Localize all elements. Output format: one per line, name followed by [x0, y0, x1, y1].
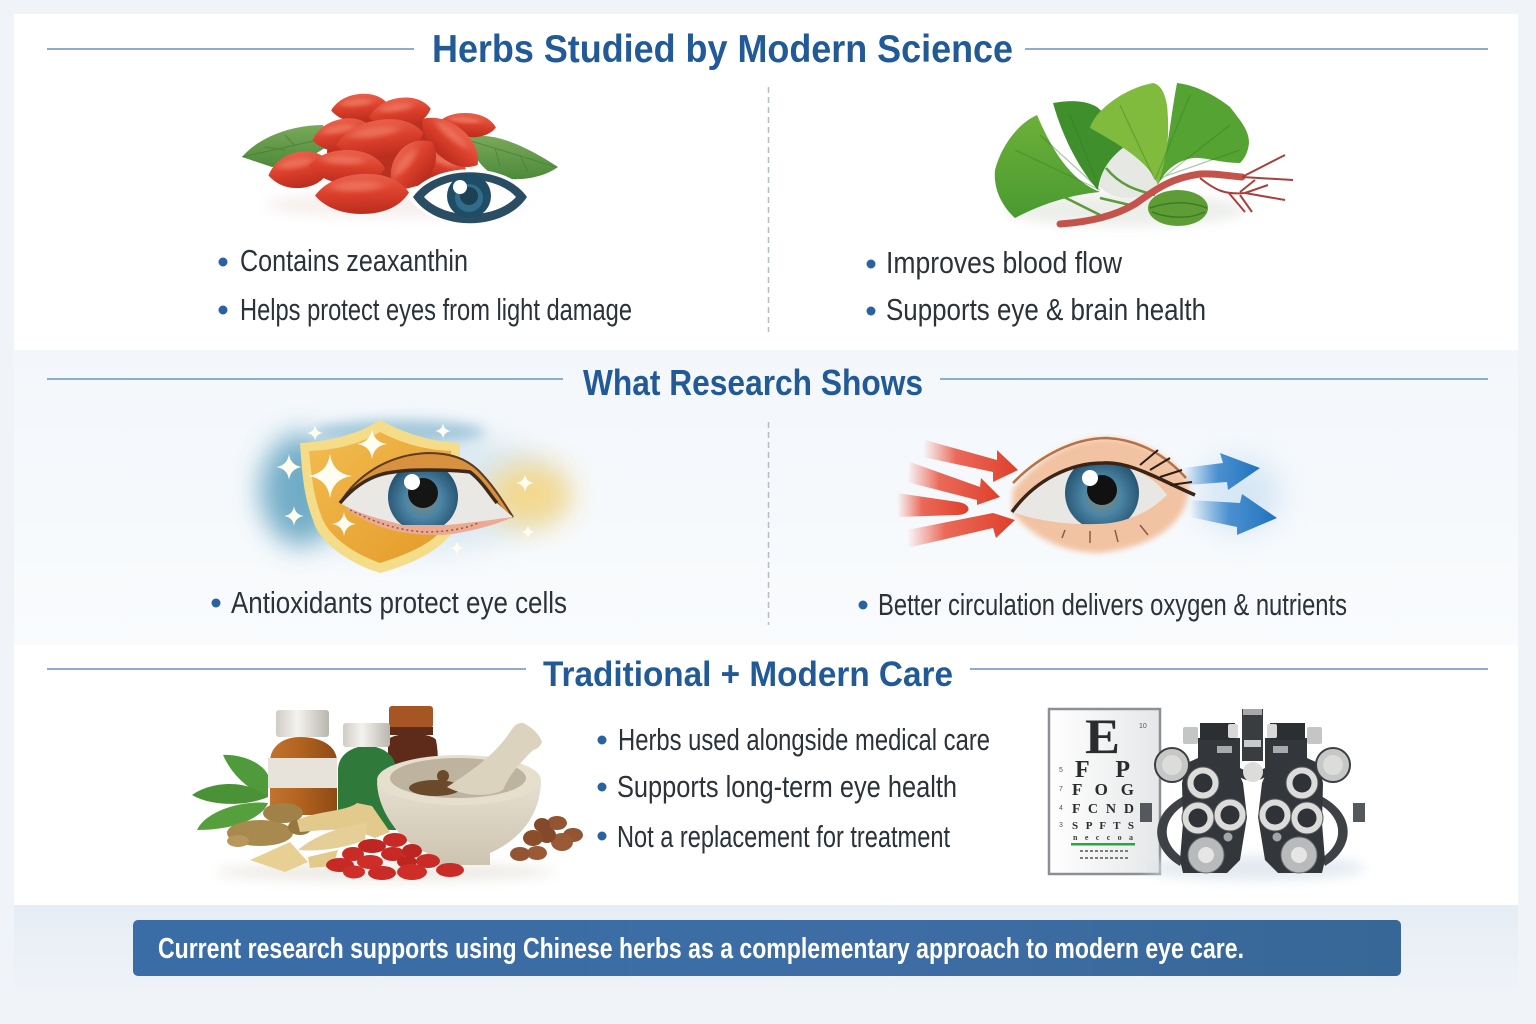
heading: herbs studied: Herbs Studied by Modern Science [432, 28, 1013, 71]
icon: herbs, bottles and mortar [192, 706, 583, 881]
icon: eye chart [1049, 708, 1160, 874]
panel background [14, 350, 1518, 645]
icon: eye with antioxidant shield [260, 420, 572, 573]
list: goji benefits [218, 243, 632, 327]
list: care points: Herbs used alongside medical care [618, 722, 990, 757]
icon: eye chart: E [1085, 708, 1120, 764]
icon: eye chart: F O G [1072, 780, 1134, 799]
panel: traditional + modern care [14, 645, 1518, 905]
heading: what research shows: What Research Shows [583, 362, 923, 403]
icon: eye chart: F P [1075, 757, 1130, 783]
list: antioxidants: Antioxidants protect eye cells [231, 585, 567, 620]
heading: traditional + modern care: Traditional + Modern Care [543, 655, 953, 694]
list: ginkgo benefits [866, 245, 1206, 327]
icon: eye chart: 4 [1059, 805, 1063, 812]
panel: herbs studied by modern science [14, 14, 1518, 350]
icon: eye with circulation arrows [897, 438, 1282, 553]
panel: conclusion [14, 905, 1518, 990]
panel background [14, 645, 1518, 905]
icon: eye chart: 7 [1059, 786, 1063, 793]
list: care points: Not a replacement for treatment [617, 819, 950, 854]
list: ginkgo benefits: Supports eye & brain health [886, 292, 1206, 327]
icon: ginkgo leaves with blood vessel [995, 83, 1293, 226]
conclusion banner [133, 920, 1401, 976]
icon: eye chart: n e c c o a [1073, 833, 1133, 842]
icon: eye chart: F C N D [1072, 802, 1134, 817]
icon: eye chart: 10 [1139, 723, 1147, 730]
list: care points: Supports long-term eye health [617, 769, 957, 804]
list: goji benefits: Contains zeaxanthin [240, 243, 468, 278]
panel: what research shows [14, 350, 1518, 645]
list: care points [598, 722, 990, 854]
list: goji benefits: Helps protect eyes from light damage [240, 292, 632, 327]
icon: goji berries with eye [242, 92, 558, 225]
icon: eye chart: 5 [1059, 767, 1063, 774]
icon: eye chart: 3 [1059, 822, 1063, 829]
panel background [14, 14, 1518, 350]
icon: eye chart: S P F T S [1072, 820, 1134, 832]
icon: phoropter [1140, 709, 1365, 880]
conclusion banner: Current research supports using Chinese herbs as a complementary approach to modern eye care. [158, 933, 1244, 965]
list: circulation: Better circulation delivers oxygen & nutrients [878, 587, 1347, 622]
list: ginkgo benefits: Improves blood flow [886, 245, 1123, 280]
panel background [14, 905, 1518, 990]
